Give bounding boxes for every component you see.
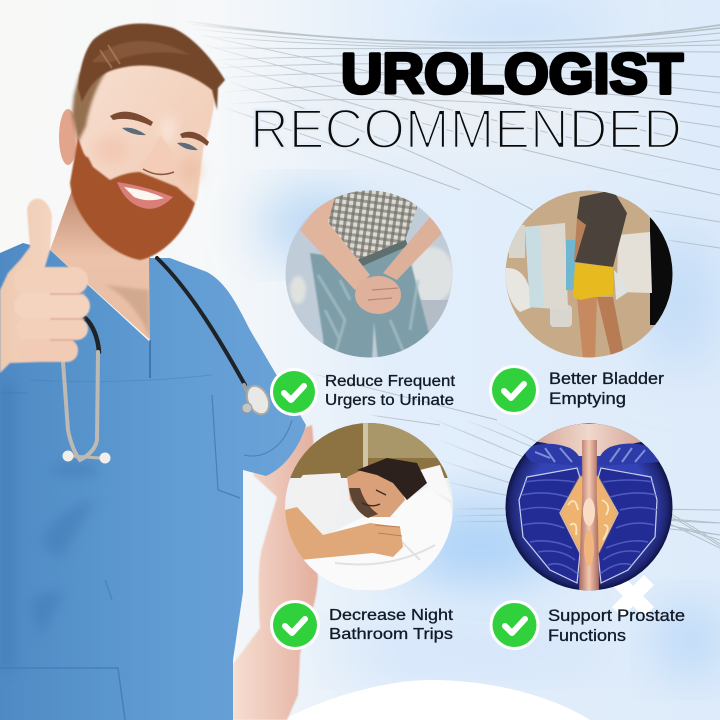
thumbs-up hand [0, 199, 90, 373]
eyes [122, 128, 198, 150]
stethoscope [62, 258, 273, 464]
benefit: support prostate [490, 600, 685, 650]
label [329, 607, 454, 643]
check badge [489, 365, 539, 415]
check badge [490, 600, 540, 650]
benefit: better bladder emptying [489, 365, 665, 415]
photo: man sleeping [285, 423, 453, 591]
hair side fade [72, 62, 112, 142]
hair [78, 24, 225, 110]
title line: urologist: UROLOGIST [341, 42, 683, 106]
face [347, 470, 405, 517]
label [549, 370, 665, 408]
ear [59, 109, 77, 165]
urethra [579, 440, 599, 591]
white mound at bottom [283, 680, 590, 720]
bladder top [537, 424, 641, 456]
jeans [310, 240, 432, 360]
title line: recommended: RECOMMENDED [250, 97, 682, 160]
bed and pillow [290, 487, 453, 590]
hair [357, 458, 427, 500]
central zone [560, 476, 618, 553]
scrub top [0, 243, 306, 720]
nose [140, 135, 177, 175]
label [548, 607, 685, 645]
left lobe [519, 468, 580, 583]
check badge [270, 600, 320, 650]
arm [285, 507, 403, 560]
t-shirt [286, 473, 341, 498]
illustration: prostate [505, 423, 673, 591]
label: Bathroom Trips [329, 626, 453, 643]
label: Better Bladder [549, 370, 665, 388]
palm and thumb [0, 199, 70, 373]
label: Decrease Night [329, 607, 454, 624]
label: Reduce Frequent [325, 373, 456, 390]
beard [70, 137, 195, 260]
right arm [233, 425, 318, 720]
check badge [270, 368, 318, 416]
fingers [14, 267, 88, 294]
photo: holding groin [285, 190, 455, 360]
benefit: reduce frequent urges [270, 368, 456, 416]
title [250, 42, 683, 160]
right lobe [598, 468, 657, 583]
eyebrows [110, 112, 209, 146]
label [325, 373, 456, 409]
lobe striations [521, 480, 657, 574]
wire net lines [185, 21, 720, 548]
face shading [94, 116, 200, 182]
mouth [117, 182, 173, 209]
benefit: decrease night trips [270, 600, 454, 650]
plaid shirt [328, 190, 417, 260]
neck [50, 190, 190, 340]
label: Emptying [549, 390, 626, 408]
arms and hand [300, 197, 370, 290]
face [74, 62, 216, 245]
label: Functions [548, 627, 626, 645]
label: Support Prostate [548, 607, 685, 625]
white cross mark [612, 575, 654, 617]
man [574, 217, 586, 262]
urinal dividers [525, 223, 568, 310]
label: Urgers to Urinate [325, 392, 454, 409]
doctor figure [0, 24, 318, 720]
photo: man at urinal [505, 190, 675, 360]
scrub folds and seams [0, 340, 292, 720]
